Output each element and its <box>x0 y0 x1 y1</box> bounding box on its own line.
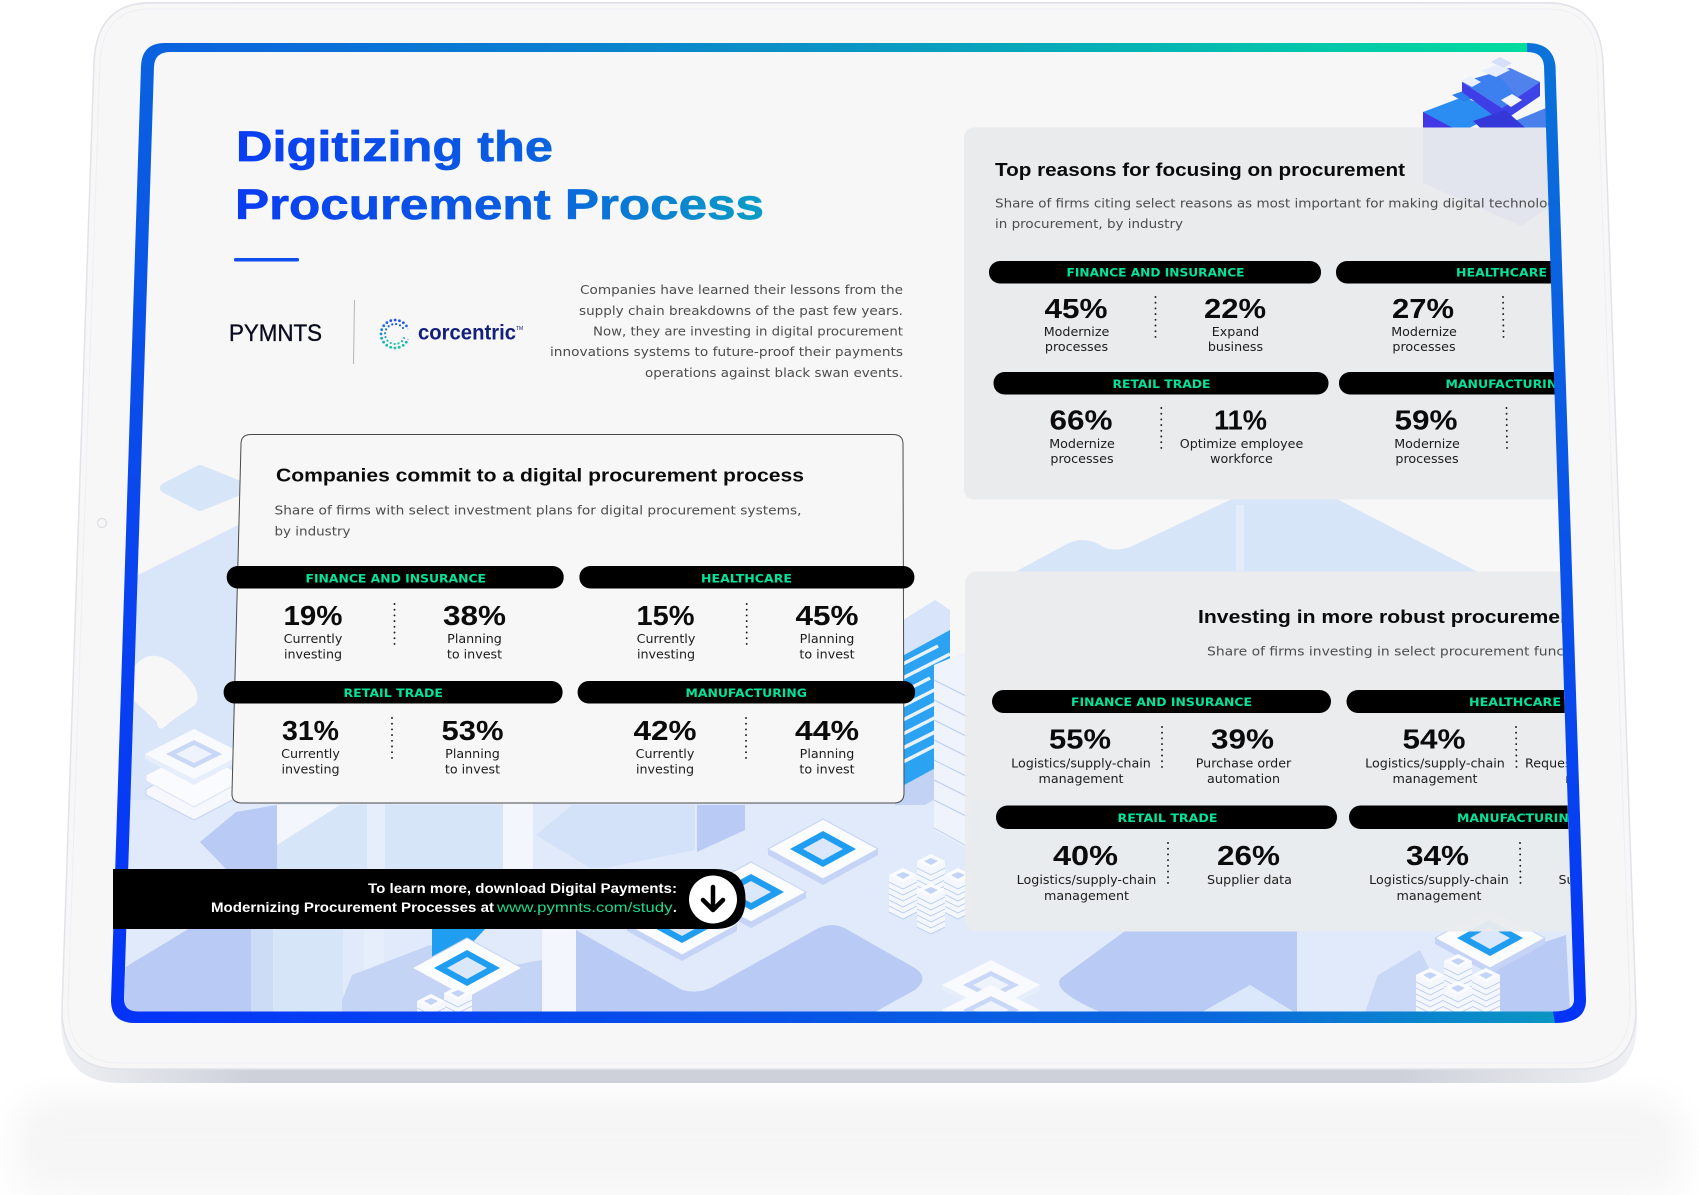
stat: 55% logistics/supply-chain management: Logistics/supply-chain <box>1011 756 1151 770</box>
stat: 15% currently investing: 15% <box>636 600 694 631</box>
pill: finance and insurance: FINANCE AND INSURANCE <box>306 572 486 586</box>
stat: 40% logistics/supply-chain management: 40% <box>1053 840 1118 871</box>
stat: 53% planning to invest: Planning <box>445 746 500 761</box>
pill: retail trade <box>994 372 1328 394</box>
chip stack left <box>145 729 243 820</box>
pill: healthcare <box>1336 261 1551 284</box>
stat: 27% modernize processes <box>1392 298 1456 354</box>
stat: 38% planning to invest <box>443 600 506 662</box>
stat: 38% planning to invest: 38% <box>443 600 506 631</box>
pill: manufacturing <box>1339 372 1554 394</box>
stat: 22% expand business: Expand <box>1212 324 1259 339</box>
stat: 45% modernize processes <box>1044 298 1109 354</box>
isometric city illustration <box>124 470 1575 1045</box>
screen frame <box>111 43 1586 1023</box>
stat: 39% purchase order automation <box>1197 729 1292 783</box>
pill: retail trade: RETAIL TRADE <box>344 686 443 700</box>
pill: finance and insurance <box>227 566 564 588</box>
stat: 66% modernize processes: processes <box>1050 451 1114 466</box>
banner text: www.pymnts.com/study <box>496 900 673 915</box>
title: Procurement Process <box>235 181 764 229</box>
stat: 19% currently investing: 19% <box>284 600 342 631</box>
pill: manufacturing <box>578 681 915 704</box>
logo divider <box>354 300 355 364</box>
stat: 31% currently investing: 31% <box>282 715 339 746</box>
panel: top reasons <box>964 128 1558 500</box>
stat: 15% currently investing: Currently <box>637 631 696 646</box>
pill: healthcare: HEALTHCARE <box>1469 695 1561 709</box>
intro paragraph: innovations systems to future-proof their payments <box>550 345 903 359</box>
pill: retail trade <box>224 681 563 704</box>
stat: 26% supplier data: 26% <box>1217 840 1280 871</box>
stat: 53% planning to invest <box>442 715 504 776</box>
stat: 45% planning to invest <box>796 600 858 662</box>
stat: 38% planning to invest: to invest <box>447 646 502 662</box>
pill: manufacturing: MANUFACTURING <box>686 686 807 700</box>
subhead: top reasons: Share of firms citing select reasons as most important for making digital technologies <box>995 196 1575 210</box>
intro paragraph: operations against black swan events. <box>645 366 903 380</box>
stat: 54% logistics/supply-chain management <box>1366 729 1504 786</box>
stat: 11% optimize employee workforce <box>1180 410 1303 463</box>
stat: 38% planning to invest: Planning <box>447 631 502 646</box>
stat: 11% optimize employee workforce: 11% <box>1214 404 1267 436</box>
subhead: companies commit <box>274 504 802 538</box>
stat: 44% planning to invest <box>795 715 859 776</box>
stat: 66% modernize processes: Modernize <box>1049 436 1115 451</box>
stat: 42% currently investing: Currently <box>636 746 695 761</box>
stat: 31% currently investing: Currently <box>281 746 340 761</box>
stat: 54% logistics/supply-chain management: management <box>1392 771 1478 786</box>
banner text: Modernizing Procurement Processes at <box>211 900 495 915</box>
stat: 53% planning to invest: 53% <box>442 715 504 746</box>
stat: 26% supplier data: Supplier data <box>1207 872 1292 887</box>
stat: 55% logistics/supply-chain management <box>1012 729 1150 786</box>
heading: robust procurement: Investing in more robust procurement <box>1198 606 1580 627</box>
stat: 26% supplier data <box>1208 846 1291 886</box>
chips <box>768 819 878 885</box>
small server stacks <box>417 854 1500 1045</box>
stat: 66% modernize processes <box>1050 410 1114 466</box>
subhead: companies commit: by industry <box>274 524 350 538</box>
stat: 34% logistics/supply-chain management: 34% <box>1406 840 1469 871</box>
stat: 45% modernize processes: Modernize <box>1044 324 1109 339</box>
logo: corcentric: corcentric <box>418 322 516 344</box>
stat: 27% modernize processes: processes <box>1392 339 1456 354</box>
stat: 31% currently investing: investing <box>281 762 340 776</box>
intro paragraph <box>550 283 903 380</box>
subhead: robust procurement: Share of firms investing in select procurement functions <box>1207 644 1598 658</box>
pill: finance and insurance: FINANCE AND INSURANCE <box>1066 266 1245 280</box>
stat: 45% modernize processes: processes <box>1045 339 1108 354</box>
stat: request label clipped by frame <box>1526 758 1567 783</box>
stat: 59% modernize processes: processes <box>1395 451 1459 466</box>
title rule <box>234 258 299 262</box>
stat: 22% expand business <box>1205 298 1266 351</box>
stat: 45% planning to invest: to invest <box>799 646 855 662</box>
intro paragraph: Now, they are investing in digital procurement <box>593 324 903 338</box>
stat: 42% currently investing: investing <box>636 762 694 776</box>
pill: healthcare: HEALTHCARE <box>1456 266 1547 280</box>
stat: 59% modernize processes <box>1396 410 1460 466</box>
stat: 15% currently investing: investing <box>637 646 695 662</box>
corcentric dotted icon <box>381 320 412 348</box>
stat: 27% modernize processes: 27% <box>1392 293 1454 324</box>
stat: 19% currently investing: investing <box>284 646 342 662</box>
stat: 44% planning to invest: Planning <box>800 746 854 761</box>
screen background and illustration <box>124 57 1574 1012</box>
pill: healthcare <box>1346 690 1565 713</box>
stat: supplier label clipped by frame: Supplier data <box>1558 872 1643 887</box>
pill: retail trade: RETAIL TRADE <box>1112 377 1211 391</box>
stat: 11% optimize employee workforce: workforce <box>1210 451 1273 466</box>
stat: 19% currently investing: Currently <box>284 631 343 646</box>
stat: 15% currently investing <box>636 600 696 662</box>
pill: finance and insurance <box>989 261 1321 284</box>
pill: manufacturing: MANUFACTURING <box>1457 811 1579 825</box>
stat: request label clipped by frame: management <box>1565 771 1650 786</box>
pill: healthcare <box>579 566 914 588</box>
stat: 42% currently investing: 42% <box>634 715 696 746</box>
stat: 45% planning to invest: 45% <box>796 600 858 631</box>
subhead: companies commit: Share of firms with select investment plans for digital procurement systems, <box>274 504 802 518</box>
panel: companies commit <box>224 434 915 803</box>
stat: 39% purchase order automation: Purchase order <box>1196 756 1292 770</box>
heading: top reasons: Top reasons for focusing on procurement <box>995 159 1405 180</box>
stat: 34% logistics/supply-chain management: management <box>1396 888 1482 903</box>
banner text: . <box>673 900 677 915</box>
stat: 40% logistics/supply-chain management: management <box>1044 888 1129 903</box>
ground shadow <box>14 1098 1684 1195</box>
server tower <box>895 600 970 850</box>
stat: 55% logistics/supply-chain management: 55% <box>1049 724 1111 754</box>
faded block under panel <box>1423 128 1552 226</box>
intro paragraph: supply chain breakdowns of the past few years. <box>579 304 903 318</box>
subhead: top reasons <box>996 198 1548 230</box>
pill: retail trade <box>996 806 1337 829</box>
title <box>235 123 764 229</box>
stat: 55% logistics/supply-chain management: management <box>1038 771 1124 786</box>
intro paragraph: Companies have learned their lessons from the <box>580 283 903 297</box>
stat: 31% currently investing <box>281 715 340 776</box>
title: Digitizing the <box>236 123 553 171</box>
icon: download arrow <box>689 876 737 924</box>
stat: 22% expand business: 22% <box>1204 293 1266 324</box>
stat: 40% logistics/supply-chain management: Logistics/supply-chain <box>1017 872 1156 887</box>
pill: manufacturing <box>1349 806 1568 829</box>
banner text <box>211 881 677 915</box>
pill: healthcare: HEALTHCARE <box>701 572 792 586</box>
pill: retail trade: RETAIL TRADE <box>1118 811 1218 825</box>
stat: 66% modernize processes: 66% <box>1050 404 1112 436</box>
stat: 11% optimize employee workforce: Optimize employee <box>1180 436 1303 451</box>
stat: 34% logistics/supply-chain management <box>1370 846 1508 902</box>
pill: finance and insurance: FINANCE AND INSURANCE <box>1071 695 1252 709</box>
stat: request label clipped by frame: Request for proposal <box>1525 756 1657 770</box>
logo: PYMNTS: PYMNTS <box>229 320 322 347</box>
logo: corcentric <box>381 320 523 348</box>
stat: 54% logistics/supply-chain management: 54% <box>1402 724 1466 754</box>
stat: 27% modernize processes: Modernize <box>1391 324 1457 339</box>
pill: finance and insurance <box>992 690 1331 713</box>
blue display behind chip <box>432 929 485 956</box>
logo: corcentric: TM <box>516 326 523 332</box>
stat: 40% logistics/supply-chain management <box>1018 846 1156 902</box>
stat: 44% planning to invest: 44% <box>795 715 859 746</box>
stat: 59% modernize processes: Modernize <box>1394 436 1460 451</box>
stat: 53% planning to invest: to invest <box>445 762 500 776</box>
panel: robust procurement <box>965 572 1572 932</box>
subhead: top reasons: in procurement, by industry <box>995 217 1183 231</box>
stat: 45% planning to invest: Planning <box>800 631 854 646</box>
stat: 42% currently investing <box>634 715 696 776</box>
pill: manufacturing: MANUFACTURING <box>1446 377 1568 391</box>
stat: 44% planning to invest: to invest <box>799 762 855 776</box>
banner text: To learn more, download Digital Payments: <box>368 881 677 896</box>
tablet camera <box>98 518 106 528</box>
download banner <box>113 869 746 929</box>
stat: 39% purchase order automation: 39% <box>1211 724 1274 754</box>
stat: 59% modernize processes: 59% <box>1394 404 1458 436</box>
stat: 45% modernize processes: 45% <box>1044 293 1108 324</box>
stat: 39% purchase order automation: automation <box>1207 771 1280 786</box>
stat: 54% logistics/supply-chain management: Logistics/supply-chain <box>1365 756 1505 770</box>
isometric blue blocks top right <box>1423 57 1546 128</box>
stat: 22% expand business: business <box>1208 339 1263 354</box>
stat: 34% logistics/supply-chain management: Logistics/supply-chain <box>1369 872 1509 887</box>
heading: companies commit: Companies commit to a digital procurement process <box>276 464 804 486</box>
stat: 19% currently investing <box>284 600 343 662</box>
